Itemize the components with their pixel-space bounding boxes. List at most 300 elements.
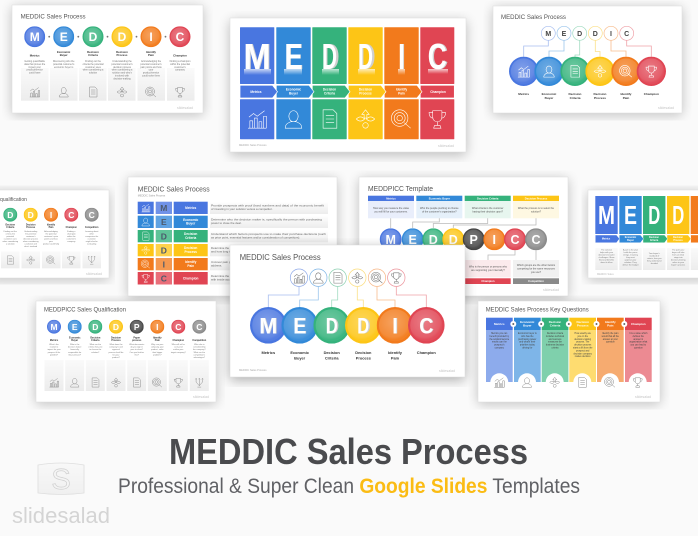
- title: MEDDIC Sales Process: [169, 431, 528, 472]
- slide title: MEDDIC Sales Process Key Questions: [486, 307, 589, 314]
- letter blocks: D: [358, 36, 373, 77]
- circle labels: Metrics: [518, 92, 529, 96]
- description text: decision's broader: [598, 254, 615, 256]
- column descriptions: considered by: [193, 347, 206, 349]
- table letter column: [156, 202, 172, 284]
- band labels: [602, 236, 684, 242]
- panel: front slide MEDDIC Sales Process: [230, 245, 465, 380]
- description text: helps with your: [600, 251, 614, 254]
- column labels: Buyer: [60, 53, 69, 57]
- ring letters: D: [577, 31, 582, 38]
- ring letters: E: [562, 31, 567, 38]
- top question boxes: Economic Buyer: [429, 196, 450, 200]
- column descriptions: Getting quantifiable: [24, 60, 45, 63]
- band labels: Champion: [430, 90, 446, 94]
- column labels: Champion: [172, 339, 185, 342]
- column descriptions: criteria the: [6, 232, 16, 236]
- letter blocks: E: [284, 36, 302, 77]
- slide title: MEDDIC Sales Process: [501, 14, 567, 21]
- column labels: Identify: [153, 336, 162, 340]
- lower question boxes: Who is the person or persons who: [469, 266, 507, 268]
- column labels: Paper: [133, 336, 140, 340]
- column labels: Criteria: [6, 226, 15, 229]
- letter blocks: E: [285, 36, 303, 77]
- grey columns: [1, 252, 101, 268]
- column questions: It is a value which: [629, 333, 647, 335]
- column descriptions: impact your: [29, 66, 41, 69]
- column headers: Decision: [576, 320, 589, 324]
- panel: front slide MEDDIC Sales Process: slidesalad: [439, 369, 455, 373]
- letter blocks: C: [429, 36, 448, 77]
- band labels: Criteria: [650, 239, 659, 242]
- column descriptions: Understanding: [24, 231, 37, 233]
- colour columns with letters: D: [672, 200, 684, 230]
- column headers: Pain: [607, 324, 614, 328]
- table description column: with inside access.: [211, 278, 235, 282]
- big letter circles: M: [259, 313, 277, 338]
- table description column: Uncover pain points your solution can: [211, 260, 260, 264]
- column descriptions: solution and who's: [112, 72, 133, 75]
- column descriptions: product, solve: [151, 348, 164, 351]
- column descriptions: criteria the potential: [83, 63, 104, 66]
- column descriptions: Finding a: [67, 231, 75, 233]
- table description column: and how long it takes.: [211, 250, 239, 254]
- column descriptions: their bigger: [152, 351, 163, 354]
- logo: slidesalad: [12, 463, 110, 528]
- column labels: Identify: [47, 224, 55, 226]
- letter circles: M: [30, 30, 40, 44]
- column descriptions: customer uses: [85, 66, 102, 69]
- column descriptions: [47, 343, 206, 359]
- big letter circles: M: [260, 313, 278, 338]
- column labels: [30, 50, 187, 58]
- ring letters: C: [624, 31, 629, 38]
- column descriptions: target company?: [171, 351, 187, 354]
- description text: solution. They: [624, 261, 637, 264]
- column descriptions: financially: [70, 349, 79, 351]
- description text: stage into: [674, 256, 683, 259]
- circle labels: Metrics: [261, 350, 275, 355]
- column descriptions: Discovering who the: [53, 60, 74, 63]
- column descriptions: your: [49, 241, 53, 243]
- table description column: as price point, essential features and/or consideration of competitors).: [211, 236, 300, 240]
- letter circles: D: [28, 210, 34, 220]
- column descriptions: problem?: [153, 354, 162, 356]
- column headers: Identify: [605, 320, 616, 324]
- circle labels: [518, 92, 659, 100]
- lower question boxes: are supporting your internally?: [471, 269, 505, 272]
- slide footer: MEDDIC Sales Process: [239, 368, 267, 372]
- column questions: measures the: [548, 341, 563, 344]
- column descriptions: a solution and: [24, 242, 37, 246]
- description text: approve your: [625, 260, 637, 262]
- table description column: Provide prospects with proof (hard numbers and data) of the economic benefit: [211, 204, 324, 208]
- table description column: Determine the decision making process: [211, 246, 262, 250]
- table letter column: C: [161, 274, 167, 284]
- column labels: [6, 224, 99, 229]
- description text: they must: [626, 256, 635, 259]
- lower question boxes: competing for the same resources: [517, 267, 556, 270]
- lower question boxes: [465, 260, 559, 284]
- table label column: Buyer: [186, 222, 196, 226]
- column descriptions: who's involved: [24, 246, 37, 248]
- column descriptions: [3, 230, 99, 248]
- column headers: Metrics: [494, 322, 505, 326]
- colour columns with letters: D: [648, 200, 660, 230]
- letter circles: I: [50, 210, 52, 220]
- slide footer: slidesalad: [177, 106, 193, 110]
- letter circles: I: [156, 322, 158, 332]
- column descriptions: Finding out the: [85, 60, 101, 63]
- table label column: Economic: [183, 218, 198, 222]
- letter blocks: D: [358, 36, 376, 77]
- column descriptions: impact for your: [47, 348, 61, 351]
- logo mark: [38, 463, 84, 494]
- column descriptions: potential customer's: [140, 63, 162, 66]
- band labels: Economic: [286, 88, 301, 92]
- column questions: includes technical: [546, 335, 565, 338]
- panel: slide bottom left, MEDDPICC Sales Qualification: [36, 301, 216, 404]
- column descriptions: competition's: [193, 353, 205, 356]
- table icon column: [138, 202, 154, 284]
- circle labels: Economic: [290, 350, 309, 355]
- column labels: Pain: [148, 53, 154, 57]
- column questions: answer in: [633, 338, 644, 341]
- slide subtitle: MEDDIC Sales Process: [138, 194, 166, 198]
- description text: A part to the plan: [623, 250, 638, 252]
- column labels: Buyer: [71, 339, 78, 342]
- column questions: decision-making: [574, 339, 592, 341]
- big letter circles: [250, 307, 445, 344]
- column questions: purchasing power: [518, 338, 537, 341]
- circle labels: Champion: [417, 350, 436, 355]
- column questions: Metrics you can: [491, 333, 507, 335]
- table letter column: I: [163, 259, 165, 269]
- column descriptions: process look like: [109, 352, 124, 354]
- circle labels: Process: [594, 96, 606, 100]
- big letter circles: D: [358, 313, 371, 338]
- band labels: Buyer: [627, 239, 634, 242]
- column descriptions: product/service: [27, 69, 43, 72]
- column descriptions: advantages?: [194, 356, 206, 359]
- column descriptions: responsible for: [68, 352, 82, 354]
- top question boxes: What the process is to select the: [518, 207, 554, 210]
- big letter circles: E: [293, 313, 306, 338]
- description text: holds the purse: [624, 251, 638, 254]
- column questions: process. The: [576, 341, 590, 344]
- column questions: criteria: [552, 346, 559, 350]
- arrow band: [240, 85, 454, 98]
- slide footer label: MEDDIC Sales: [597, 273, 615, 276]
- big letter circles: I: [392, 313, 398, 338]
- column labels: Metrics: [50, 339, 59, 342]
- letter blocks: I: [398, 36, 405, 77]
- letter circles: C: [510, 233, 520, 247]
- table label column: Decision: [184, 232, 197, 236]
- description text: decision-making: [671, 260, 685, 262]
- column questions: benefit provided by: [490, 335, 510, 338]
- column descriptions: approval: [112, 349, 120, 351]
- column descriptions: product/service: [143, 72, 160, 75]
- description text: buyer's process: [671, 264, 685, 266]
- column descriptions: Understanding the: [112, 60, 132, 63]
- band labels: Process: [359, 92, 372, 96]
- column descriptions: What's the: [49, 344, 59, 346]
- column descriptions: could have: [29, 72, 41, 75]
- circle labels: Decision: [324, 350, 340, 355]
- column descriptions: company, your: [151, 347, 164, 349]
- slide footer: slidesalad: [86, 272, 102, 276]
- colour columns with letters: M: [598, 200, 615, 230]
- column descriptions: Finding out the: [4, 231, 17, 233]
- column questions: and success: [549, 339, 562, 341]
- disc icons: [494, 377, 642, 387]
- panel: slide top left, MEDDIC circles with columns: [12, 5, 203, 115]
- circle labels: Buyer: [545, 96, 554, 100]
- column questions: makes decision: [575, 356, 591, 358]
- column questions: Decision criteria: [547, 333, 563, 335]
- big letter circles: C: [419, 313, 433, 338]
- column descriptions: decision maker: [68, 347, 82, 349]
- description boxes: [595, 248, 698, 270]
- circle labels: Decision: [569, 92, 581, 96]
- top question boxes: What criteria is the customer: [472, 207, 504, 210]
- big letter circles: D: [326, 313, 339, 338]
- circle labels: Pain: [623, 96, 629, 100]
- column questions: decision company: [574, 353, 593, 355]
- panel: slide MEDDPICC Template: [359, 177, 568, 298]
- top question boxes: Decision Process: [525, 196, 548, 200]
- column descriptions: champion: [67, 234, 76, 236]
- top question boxes: you will fill for your customers.: [374, 210, 408, 213]
- ring letters: D: [593, 31, 598, 38]
- column questions: who has the: [521, 335, 534, 338]
- slide title: MEDDPICC Sales Qualification: [44, 307, 126, 314]
- column descriptions: potential customer's: [111, 63, 133, 66]
- column descriptions: potential customer's: [53, 63, 75, 66]
- top question boxes: Metrics: [386, 196, 396, 200]
- circle labels: [261, 350, 436, 360]
- slide footer: MEDDIC Sales Process: [239, 143, 267, 147]
- column icons: [30, 87, 185, 97]
- column descriptions: customer's: [174, 66, 187, 69]
- column icons: [7, 256, 95, 264]
- band labels: Decision: [673, 236, 683, 239]
- letter circles: P: [470, 233, 478, 247]
- column labels: Process: [26, 227, 36, 229]
- colour columns with letters: [595, 196, 698, 234]
- column questions: business decision: [546, 345, 565, 347]
- column labels: Criteria: [91, 339, 100, 342]
- letter circles: C: [176, 30, 185, 44]
- column descriptions: could solve them: [142, 74, 160, 78]
- top question boxes: solution?: [531, 210, 542, 213]
- column questions: prospect's: [494, 344, 505, 347]
- column descriptions: other: [89, 232, 94, 236]
- slide footer: slidesalad: [543, 288, 559, 292]
- description text: decided: [651, 263, 658, 265]
- grey columns: [21, 68, 194, 101]
- column labels: Decision: [116, 50, 128, 54]
- column labels: Competition: [85, 226, 99, 229]
- table description column: [210, 202, 328, 284]
- top question boxes: [368, 196, 559, 218]
- panel: slide bottom right, key questions: [478, 301, 660, 404]
- column questions: you can lead to: [631, 344, 647, 347]
- column labels: Decision: [26, 224, 35, 226]
- column labels: Decision: [6, 224, 15, 226]
- column descriptions: decision process: [113, 66, 132, 69]
- column headers: Buyer: [523, 324, 532, 328]
- description text: from an initial: [672, 254, 685, 256]
- top question boxes: Who the people pushing to choose: [420, 207, 459, 210]
- description text: The solution: [601, 250, 612, 252]
- icon rings: [290, 269, 405, 286]
- description text: financial benefits: [599, 258, 614, 262]
- column descriptions: product?: [112, 356, 121, 359]
- band labels: Process: [673, 239, 683, 242]
- top question boxes: Decision Criteria: [477, 196, 499, 200]
- letter blocks: D: [322, 36, 340, 77]
- column descriptions: decision process: [23, 238, 38, 240]
- column labels: Criteria: [88, 53, 98, 57]
- column questions: answer at your: [603, 338, 618, 341]
- table letter column: M: [160, 203, 167, 213]
- letter blocks: I: [399, 36, 406, 77]
- lower question boxes: Competition: [528, 279, 544, 283]
- circle labels: Decision: [594, 92, 606, 96]
- top question boxes: How way you measure the value: [373, 207, 409, 210]
- band labels: Pain: [398, 92, 405, 96]
- big letter circles: D: [326, 313, 338, 338]
- lower question boxes: Champion: [481, 279, 495, 283]
- description text: strings, meaning: [623, 254, 638, 256]
- table letter column: D: [161, 245, 167, 255]
- connectors: [391, 218, 536, 260]
- description text: refers to your: [672, 261, 684, 264]
- column descriptions: for your: [113, 354, 120, 356]
- slide title: MEDDIC Sales Process: [21, 13, 86, 20]
- column descriptions: carry and: [174, 347, 182, 349]
- description text: about it offers: [600, 261, 613, 264]
- logo letter: S: [51, 464, 71, 496]
- ring letters: I: [610, 31, 612, 38]
- letter circles: [3, 208, 99, 222]
- column descriptions: involved with: [115, 74, 130, 78]
- column descriptions: economic: [50, 347, 58, 349]
- column labels: Decision: [90, 336, 100, 340]
- table label column: Champion: [183, 276, 199, 280]
- description text: Your buyer's: [649, 253, 660, 255]
- column descriptions: problem?: [50, 354, 59, 356]
- column descriptions: evaluating: [87, 242, 96, 246]
- letter circles: C: [531, 233, 541, 247]
- connectors: [524, 40, 651, 57]
- panel: slide left edge, qualification: [0, 190, 109, 280]
- letter circles: E: [409, 233, 417, 247]
- column labels: Process: [111, 339, 121, 342]
- column descriptions: companies the: [85, 235, 99, 238]
- description text: standard of: [649, 254, 660, 258]
- column descriptions: Finding a champion: [170, 60, 190, 63]
- ring icons: [294, 272, 401, 283]
- column questions: [489, 332, 648, 358]
- letter circles: C: [68, 210, 74, 220]
- letter circles: M: [385, 233, 396, 247]
- column labels: Metrics: [30, 54, 40, 58]
- lower question boxes: Which groups are the other factors: [517, 264, 555, 267]
- column descriptions: Learning about: [85, 231, 98, 233]
- column questions: driving for: [522, 346, 533, 350]
- column questions: Identify the pain: [602, 333, 618, 335]
- band labels: Identify: [396, 88, 407, 92]
- letter circles: E: [72, 322, 78, 332]
- table label column: [174, 202, 208, 284]
- big letter circles: I: [393, 313, 398, 338]
- band labels: Economic: [625, 236, 636, 239]
- column descriptions: customer's: [26, 235, 36, 238]
- slide title: MEDDIC Sales Process: [240, 253, 321, 262]
- description text: [598, 248, 685, 266]
- letter circles: D: [7, 210, 13, 220]
- column descriptions: Who is the: [70, 344, 79, 346]
- top question boxes: basing their decision upon?: [472, 210, 504, 213]
- icon blocks: [240, 99, 454, 139]
- table description column: Determine who the decision maker is, specifically the person with purchasing: [211, 218, 322, 222]
- column descriptions: company: [67, 241, 75, 243]
- column descriptions: this?: [135, 353, 140, 356]
- letter circles: C: [175, 322, 181, 332]
- panel: slide table MEDDIC Sales Process: [128, 177, 337, 298]
- big circle icons: [518, 65, 657, 77]
- letter circles: D: [113, 322, 119, 332]
- table label column: Decision: [184, 246, 197, 250]
- column descriptions: the purchase?: [68, 353, 82, 356]
- column descriptions: solution?: [91, 351, 100, 354]
- column labels: Pain: [49, 227, 54, 229]
- column descriptions: decision-making: [113, 77, 131, 80]
- circle labels: Criteria: [570, 96, 581, 100]
- column labels: [50, 336, 207, 342]
- table label column: Process: [184, 250, 197, 254]
- arrow band: [595, 235, 698, 243]
- column questions: Economic buyer is: [518, 333, 537, 335]
- column descriptions: criteria they use: [88, 346, 103, 349]
- big circles: [509, 57, 666, 86]
- column descriptions: company: [175, 69, 186, 72]
- column questions: organization what: [629, 341, 648, 344]
- column descriptions: might also be: [86, 240, 99, 243]
- letter blocks: [240, 27, 454, 84]
- letter circles: D: [449, 233, 458, 247]
- letter circles: M: [50, 322, 58, 332]
- table letter column: D: [161, 231, 167, 241]
- subtitle: Professional & Super Clean Google Slides Templates: [118, 475, 580, 498]
- circle labels: Decision: [355, 350, 371, 355]
- circle labels: Buyer: [294, 355, 306, 360]
- column descriptions: the potential: [25, 232, 37, 236]
- band labels: Metrics: [250, 90, 262, 94]
- colour columns with letters: E: [624, 200, 637, 230]
- column descriptions: customer's pain: [44, 235, 58, 238]
- column labels: Competition: [192, 339, 207, 342]
- description text: The path your: [672, 250, 684, 252]
- column questions: you on the: [577, 335, 589, 338]
- letter rings: [541, 26, 634, 40]
- column labels: process: [132, 339, 142, 342]
- column labels: Identify: [146, 50, 156, 54]
- letter circles: I: [149, 30, 153, 44]
